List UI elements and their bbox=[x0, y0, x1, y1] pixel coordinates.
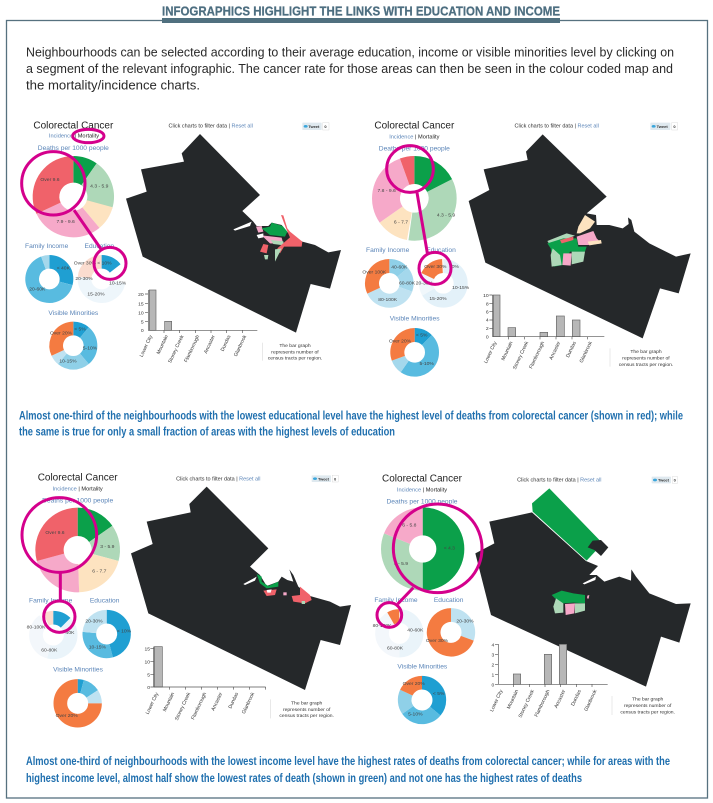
highlight rings bbox=[387, 146, 451, 284]
bar chart: Dundas bbox=[227, 691, 240, 710]
instruction text: Click charts to filter data | Reset all bbox=[514, 124, 599, 130]
map bbox=[475, 488, 691, 687]
heading: visible minorities: Visible Minorities bbox=[397, 664, 448, 671]
bar chart: Ancaster bbox=[548, 340, 562, 361]
heading: family income: Family Income bbox=[29, 598, 73, 605]
intro text: Neighbourhoods can be selected according to their average education, income or visible minorities level by clicking on bbox=[26, 46, 674, 60]
tweet button: 0 bbox=[324, 124, 327, 129]
bar graph caption bbox=[262, 343, 322, 362]
bar chart: Glanbrook bbox=[579, 340, 594, 364]
heading: deaths: Deaths per 1000 people bbox=[379, 146, 450, 153]
bar chart: 0 bbox=[141, 328, 144, 334]
bar chart: Mountain bbox=[500, 340, 515, 362]
donut: education: 10-15% bbox=[109, 281, 127, 287]
donut: family income: 60-80K bbox=[387, 646, 404, 652]
donut: education bbox=[85, 613, 132, 655]
text block: income finding bbox=[26, 754, 670, 785]
bar graph caption: represents number of bbox=[622, 356, 670, 362]
bar chart: Lower City bbox=[483, 340, 499, 365]
donut: family income: Over 100K bbox=[362, 269, 387, 275]
panel: bottom right, highest income bbox=[373, 474, 691, 724]
donut: education: 15-20% bbox=[87, 291, 105, 297]
donut: deaths per 1000: 7.9 - 9.6 bbox=[57, 219, 75, 225]
tweet button: 0 bbox=[673, 124, 676, 129]
bar chart: 15 bbox=[138, 301, 144, 307]
tweet button bbox=[312, 475, 338, 482]
donut: education: 10-15% bbox=[452, 285, 470, 291]
bar chart: Flamborough bbox=[190, 691, 208, 721]
donut: visible minorities bbox=[398, 676, 446, 724]
donut: family income bbox=[373, 610, 424, 657]
bar chart: 20 bbox=[138, 292, 144, 298]
donut: visible minorities: 5-10% bbox=[408, 712, 423, 718]
panel: top left, lowest education bbox=[22, 120, 341, 370]
donut: visible minorities: Over 20% bbox=[50, 331, 73, 337]
highlight rings bbox=[377, 504, 482, 627]
bar chart: 0 bbox=[486, 334, 489, 340]
bar chart: 0 bbox=[492, 682, 495, 688]
tweet button bbox=[650, 123, 678, 130]
donut: family income bbox=[27, 610, 78, 660]
donut: deaths per 1000 bbox=[35, 158, 112, 235]
donut: family income bbox=[362, 259, 416, 308]
heading: education: Education bbox=[434, 597, 464, 604]
tweet button: 0 bbox=[334, 476, 337, 481]
donut: education: 15-20% bbox=[429, 296, 447, 302]
text block: education finding bbox=[19, 408, 683, 438]
bar chart: Glanbrook bbox=[241, 691, 256, 715]
panel: top right, highest education bbox=[362, 120, 691, 377]
intro text bbox=[26, 46, 674, 92]
bar graph caption: census tracts per region. bbox=[619, 362, 673, 368]
header bar bbox=[162, 2, 560, 23]
instruction text: Click charts to filter data | Reset all bbox=[176, 476, 261, 482]
donut: visible minorities: < 5% bbox=[416, 332, 428, 338]
heading: family income: Family Income bbox=[366, 247, 410, 254]
donut: visible minorities: 5-10% bbox=[83, 345, 98, 351]
bar chart: Stoney Creek bbox=[512, 340, 530, 371]
bar chart: 0 bbox=[147, 685, 150, 691]
donut: education: Over 30% < 10% bbox=[74, 260, 112, 266]
bar chart: Dundas bbox=[565, 340, 578, 359]
bar graph caption: The bar graph bbox=[630, 349, 662, 355]
bar chart: 8 bbox=[486, 301, 489, 307]
title: Colorectal Cancer bbox=[382, 474, 463, 485]
bar chart bbox=[489, 642, 608, 719]
bar chart: Glanbrook bbox=[233, 334, 248, 358]
bar chart: Mountain bbox=[156, 334, 170, 355]
donut: deaths per 1000 bbox=[38, 511, 117, 589]
donut: deaths per 1000: 4.3 - 5.9 bbox=[437, 212, 455, 218]
donut: family income: < 40K bbox=[57, 265, 71, 271]
donut: deaths per 1000: 7.8 - 9.6 bbox=[378, 188, 396, 194]
donut: deaths per 1000: Over 9.6 bbox=[45, 530, 65, 536]
heading: deaths: Deaths per 1000 people bbox=[386, 498, 458, 505]
tweet button: Tweet bbox=[658, 478, 670, 483]
bar chart: Ancaster bbox=[210, 691, 224, 712]
bar chart: 3 bbox=[492, 652, 495, 658]
donut: family income: 20-60K bbox=[29, 287, 46, 293]
bar chart: Ancaster bbox=[553, 689, 567, 709]
bar chart: Lower City bbox=[139, 334, 154, 358]
donut: deaths per 1000: 4.3 - 5.9 bbox=[90, 184, 109, 190]
bar graph caption: represents number of bbox=[271, 349, 319, 355]
bar chart: Ancaster bbox=[203, 334, 217, 355]
bar chart: 5 bbox=[147, 672, 150, 678]
bar chart: 4 bbox=[486, 318, 489, 324]
donut: visible minorities: Over 20% bbox=[389, 338, 412, 344]
donut: education: Over 30% bbox=[424, 264, 447, 270]
bar chart: Flamborough bbox=[534, 689, 552, 718]
donut: visible minorities bbox=[389, 328, 439, 377]
map bbox=[469, 134, 691, 338]
bar graph caption: census tracts per region. bbox=[620, 709, 675, 715]
bar graph caption: The bar graph bbox=[279, 343, 311, 349]
bar chart: 15 bbox=[144, 647, 150, 653]
donut: deaths per 1000: 6 - 5.8 bbox=[402, 523, 417, 529]
donut: deaths per 1000: 4 - 5.9 bbox=[394, 561, 408, 567]
map bbox=[131, 487, 351, 690]
donut: family income: 80-100K bbox=[378, 297, 398, 303]
incidence mortality nav: Incidence | Mortality bbox=[397, 487, 447, 493]
bar chart: 4 bbox=[492, 642, 495, 648]
donut: visible minorities: Over 20% bbox=[403, 681, 425, 687]
highlight rings bbox=[22, 129, 126, 279]
donut: visible minorities: Over 20% bbox=[56, 713, 78, 719]
donut: deaths per 1000: 6 - 7.7 bbox=[92, 568, 107, 574]
bar graph caption: census tracts per region. bbox=[279, 713, 334, 719]
heading: deaths: Deaths per 1000 people bbox=[42, 498, 113, 505]
donut: education: 10-15% bbox=[89, 645, 106, 651]
bar chart: 10 bbox=[483, 293, 489, 299]
donut: family income: 40-60K bbox=[407, 628, 424, 634]
panel: bottom left, lowest income bbox=[22, 473, 351, 727]
bar graph caption: represents number of bbox=[283, 707, 331, 713]
bar chart: Dundas bbox=[220, 334, 233, 352]
map bbox=[126, 134, 341, 333]
bar chart bbox=[483, 293, 604, 371]
bar chart: 1 bbox=[492, 672, 495, 678]
heading: education: Education bbox=[90, 598, 120, 605]
heading: education: Education bbox=[85, 243, 114, 250]
bar chart: Flamborough bbox=[183, 334, 201, 363]
donut: education bbox=[416, 260, 470, 307]
header bar: INFOGRAPHICS HIGHLIGHT THE LINKS WITH EDUCATION AND INCOME bbox=[162, 4, 560, 18]
bar chart: Glanbrook bbox=[583, 689, 599, 712]
tweet button: Tweet bbox=[308, 124, 320, 129]
donut: visible minorities: < 5% bbox=[74, 327, 86, 333]
bar graph caption: represents number of bbox=[624, 703, 672, 709]
donut: education: 0% bbox=[452, 264, 459, 270]
heading: family income: Family Income bbox=[25, 243, 69, 250]
donut: visible minorities: < 5% bbox=[433, 691, 445, 697]
donut: education: 20-30% bbox=[85, 619, 103, 625]
bar chart bbox=[138, 290, 257, 364]
tweet button: Tweet bbox=[318, 476, 330, 481]
donut: education: 20-30% bbox=[456, 619, 474, 625]
title: Colorectal Cancer bbox=[33, 120, 114, 131]
donut: education bbox=[74, 259, 127, 299]
bar chart: Stoney Creek bbox=[174, 691, 192, 722]
bar chart: Mountain bbox=[506, 689, 520, 710]
intro text: a segment of the relevant infographic. The cancer rate for those areas can then be seen in the colour coded map and bbox=[26, 62, 673, 76]
donut: education: < 10% bbox=[117, 628, 132, 634]
tweet button bbox=[652, 477, 678, 483]
bar chart: Stoney Creek bbox=[167, 334, 186, 364]
bar chart: 10 bbox=[138, 310, 144, 316]
bar chart: Lower City bbox=[145, 691, 160, 716]
incidence mortality nav: Incidence | Mortality bbox=[49, 134, 99, 140]
donut: deaths per 1000: 6 - 7.7 bbox=[394, 219, 408, 225]
instruction text: Click charts to filter data | Reset all bbox=[168, 124, 253, 130]
donut: family income bbox=[27, 257, 71, 301]
heading: visible minorities: Visible Minorities bbox=[48, 310, 99, 317]
donut: visible minorities: 10-15% bbox=[59, 358, 77, 364]
highlight rings bbox=[22, 498, 97, 632]
incidence mortality nav: Incidence | Mortality bbox=[53, 486, 103, 492]
bar graph caption bbox=[612, 696, 675, 715]
text block: education finding: the same is true for only a small fraction of areas with the highest levels of education bbox=[19, 424, 395, 438]
bar chart bbox=[144, 647, 266, 722]
bar graph caption: The bar graph bbox=[632, 697, 664, 703]
heading: deaths: Deaths per 1000 people bbox=[38, 145, 109, 152]
donut: deaths per 1000 bbox=[387, 513, 459, 585]
bar chart: Dundas bbox=[570, 689, 583, 707]
donut: education: 20-30% bbox=[416, 280, 433, 286]
tweet button bbox=[302, 123, 329, 130]
donut: visible minorities: 5-10% bbox=[419, 361, 434, 367]
bar chart: 2 bbox=[492, 662, 495, 668]
bar graph caption bbox=[271, 699, 334, 719]
bar graph caption: The bar graph bbox=[291, 701, 323, 707]
bar graph caption: census tracts per region. bbox=[268, 356, 322, 362]
donut: deaths per 1000: < 4.3 bbox=[444, 545, 455, 551]
heading: visible minorities: Visible Minorities bbox=[390, 316, 440, 323]
bar chart: Mountain bbox=[162, 691, 176, 713]
bar graph caption bbox=[610, 348, 673, 368]
title: Colorectal Cancer bbox=[38, 473, 118, 484]
bar chart: 6 bbox=[486, 309, 489, 315]
incidence mortality nav: Incidence | Mortality bbox=[389, 134, 440, 140]
donut: family income: 80-100K bbox=[27, 625, 46, 631]
heading: education: Education bbox=[426, 247, 456, 254]
donut: family income: 60-80K bbox=[399, 280, 416, 286]
instruction text: Click charts to filter data | Reset all bbox=[517, 477, 602, 483]
bar chart: 2 bbox=[486, 326, 489, 332]
bar chart: Flamborough bbox=[528, 340, 546, 370]
title: Colorectal Cancer bbox=[374, 120, 455, 131]
donut: deaths per 1000 bbox=[375, 159, 455, 238]
bar chart: Stoney Creek bbox=[518, 689, 536, 719]
donut: family income: 80-100K bbox=[373, 623, 392, 629]
donut: visible minorities bbox=[49, 321, 98, 370]
donut: deaths per 1000: Over 9.6 bbox=[40, 177, 60, 183]
donut: deaths per 1000: 3 - 5.9 bbox=[100, 544, 115, 550]
donut: education bbox=[426, 610, 474, 655]
donut: family income: 40K bbox=[66, 630, 75, 636]
intro text: the mortality/incidence charts. bbox=[26, 78, 200, 92]
tweet button: Tweet bbox=[657, 124, 668, 129]
donut: visible minorities bbox=[54, 679, 102, 727]
heading: family income: Family Income bbox=[374, 597, 418, 604]
heading: visible minorities: Visible Minorities bbox=[53, 667, 104, 674]
tweet button: 0 bbox=[674, 478, 677, 483]
donut: family income: 60-80K bbox=[41, 647, 58, 653]
donut: family income: 40-60K bbox=[391, 265, 408, 271]
donut: education: Over 30% bbox=[426, 638, 449, 644]
bar chart: 5 bbox=[141, 319, 144, 325]
bar chart: 10 bbox=[144, 660, 150, 666]
donut: education: 20-30% bbox=[75, 276, 93, 282]
bar chart: Lower City bbox=[489, 689, 505, 713]
